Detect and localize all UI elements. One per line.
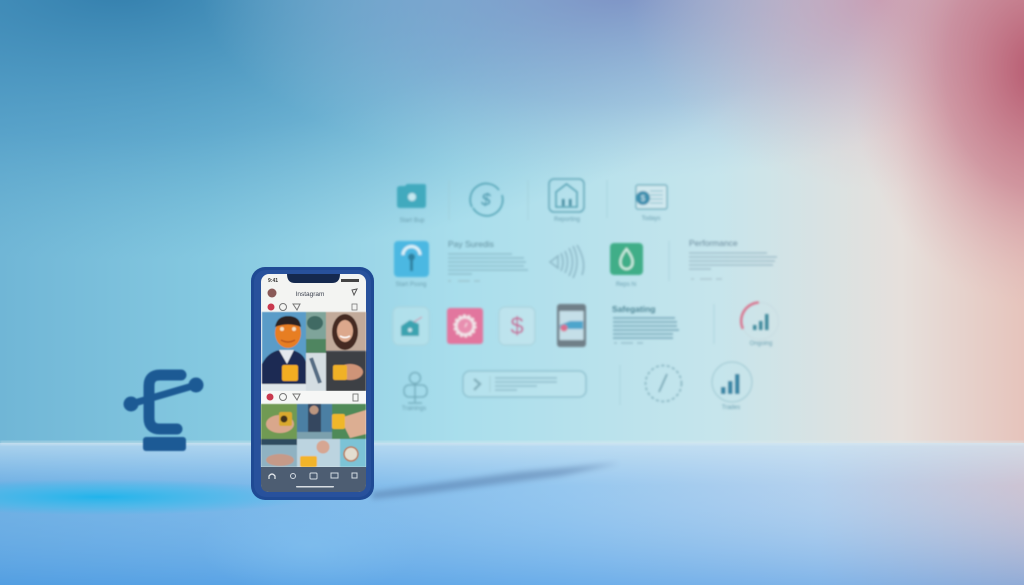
bottom navigation bar	[261, 467, 366, 492]
icon: wall clock	[646, 366, 682, 402]
app header: Instagram	[296, 291, 324, 298]
dashboard panel: faded wall icons	[393, 179, 778, 412]
icon: outlined house photo	[393, 307, 429, 345]
background wall	[0, 0, 1024, 445]
icon: tablet device	[557, 304, 586, 347]
icon: dollar tile: $	[510, 313, 524, 340]
second action row	[261, 391, 366, 404]
icon: document with coin: $	[641, 194, 646, 203]
photo grid: second post	[261, 404, 366, 467]
small thumbnails	[306, 312, 326, 339]
dividers	[449, 180, 714, 405]
icon: microphone figure	[402, 372, 427, 412]
icon: hexagon bar chart	[712, 362, 752, 411]
icon: dollar refresh circle: $	[480, 190, 491, 209]
icon: blue desk figurine	[124, 375, 204, 451]
icon: document with coin	[636, 185, 667, 222]
callout: outlined message box	[463, 371, 586, 397]
icon: hexagon bar chart: Trades	[722, 405, 740, 411]
status bar and notch: 9:41	[268, 278, 278, 284]
icon: gauge with bars: Ongoing	[750, 341, 772, 347]
icon: microphone figure: Trainings	[402, 406, 426, 412]
action row	[268, 304, 357, 310]
app header	[268, 288, 357, 298]
smiling woman	[326, 312, 366, 391]
floor surface	[0, 441, 1024, 585]
text block: Pay Suredis	[448, 239, 528, 281]
icon: camera	[397, 184, 426, 224]
icon: camera: Start Bup	[399, 218, 425, 224]
phone body	[251, 267, 374, 500]
photo grid: first post	[262, 312, 366, 391]
cartoon man with mug	[262, 312, 306, 391]
text block: Safegating	[612, 304, 679, 343]
status bar and notch	[268, 274, 359, 284]
phone shadow on floor	[372, 463, 620, 499]
icon: pink gear tile	[447, 308, 483, 344]
icon: green drop tile	[610, 243, 643, 288]
phone screen	[261, 274, 366, 492]
icon: sound waves	[550, 245, 584, 278]
icon: gauge with bars	[741, 302, 778, 347]
text block: Performance	[689, 238, 777, 279]
icon: document with coin: Todays	[641, 216, 661, 222]
icon: bank building	[549, 179, 584, 223]
icon: bank building: Reporting	[554, 217, 580, 223]
text block: Performance: Performance	[689, 238, 738, 248]
phone	[251, 267, 374, 500]
text block: Pay Suredis: Pay Suredis	[448, 239, 494, 249]
text block: Safegating: Safegating	[612, 304, 655, 314]
icon: green drop tile: Reps hi	[616, 282, 636, 288]
icon: dollar refresh circle	[470, 184, 503, 216]
icon: blue app tile	[394, 241, 429, 288]
icon: dollar tile	[499, 307, 535, 345]
icon: blue app tile: Start Pssng	[395, 282, 427, 288]
